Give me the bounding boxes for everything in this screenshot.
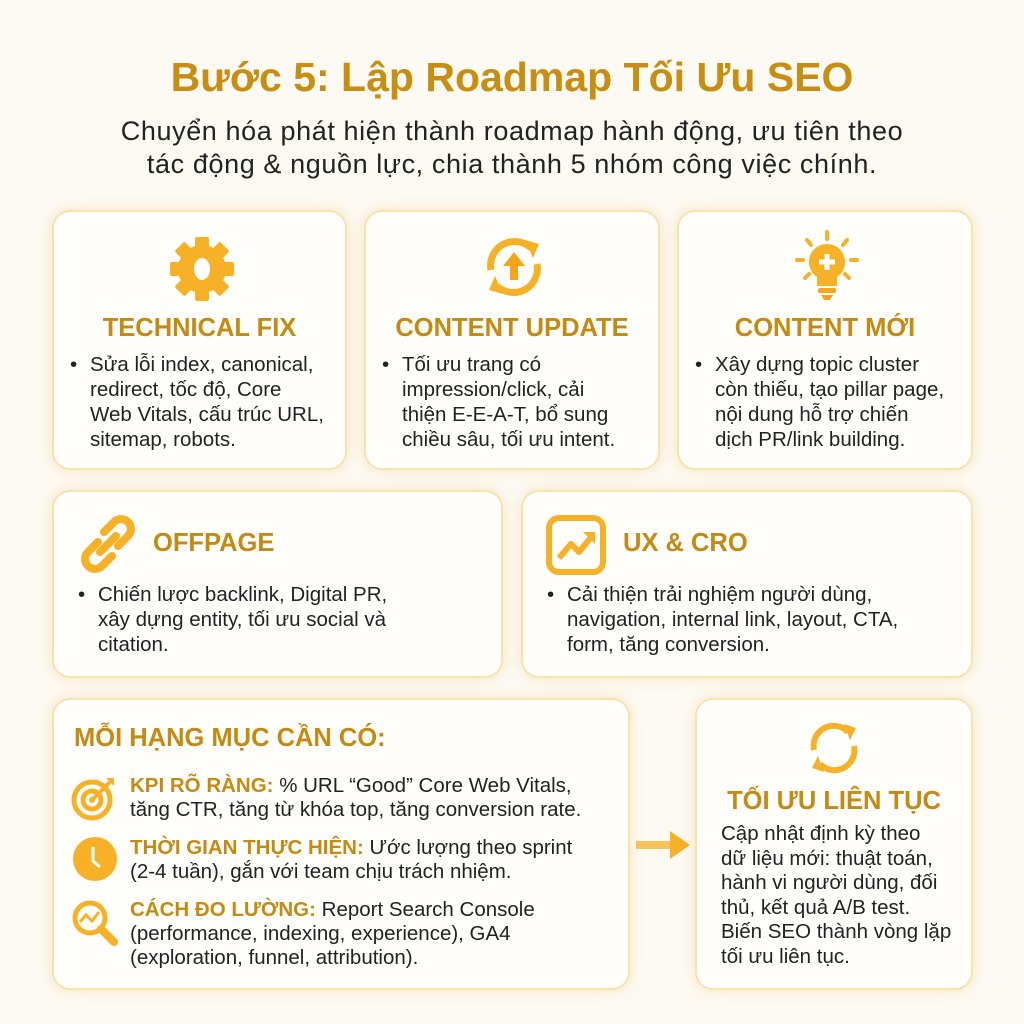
panel: moi hang muc can co — [52, 698, 630, 990]
item: cach do luong — [130, 898, 535, 969]
text: tối ưu liên tục. — [721, 945, 850, 968]
icon: refresh — [810, 722, 858, 774]
text: nội dung hỗ trợ chiến — [715, 403, 909, 426]
heading: MỖI HẠNG MỤC CẦN CÓ: — [74, 724, 386, 752]
heading: UX & CRO — [623, 529, 748, 557]
item: cach do luong: CÁCH ĐO LƯỜNG: Report Search Console — [130, 898, 535, 921]
item: thoi gian: THỜI GIAN THỰC HIỆN: Ước lượng theo sprint — [130, 836, 572, 859]
text: Sửa lỗi index, canonical, — [90, 353, 313, 376]
icon: chart — [546, 515, 606, 575]
heading: TECHNICAL FIX — [103, 314, 296, 342]
heading: CONTENT MỚI — [735, 314, 915, 342]
panel: toi uu lien tuc — [695, 698, 973, 990]
text: Chiến lược backlink, Digital PR, — [98, 583, 387, 606]
heading: CONTENT UPDATE — [395, 314, 629, 342]
icon: bulb — [795, 230, 859, 300]
item: KPI — [130, 774, 581, 821]
text: Xây dựng topic cluster — [715, 353, 919, 376]
title: Bước 5: Lập Roadmap Tối Ưu SEO — [171, 54, 853, 100]
text: Tối ưu trang có — [402, 353, 541, 376]
text: dịch PR/link building. — [715, 428, 905, 451]
icon: clock — [73, 837, 117, 881]
text: Cải thiện trải nghiệm người dùng, — [567, 583, 872, 606]
subtitle: Chuyển hóa phát hiện thành roadmap hành động, ưu tiên theo — [121, 116, 903, 146]
item: cach do luong: (exploration, funnel, attribution). — [130, 946, 418, 969]
subtitle: tác động & nguồn lực, chia thành 5 nhóm công việc chính. — [147, 149, 877, 179]
text — [382, 353, 615, 451]
panel: content moi — [677, 210, 973, 470]
panel: technical fix — [52, 210, 347, 470]
icon: target — [72, 778, 114, 820]
text: dữ liệu mới: thuật toán, — [721, 847, 933, 870]
text: redirect, tốc độ, Core — [90, 378, 281, 401]
text: hành vi người dùng, đối — [721, 871, 937, 894]
panel: offpage — [52, 490, 503, 678]
text: Cập nhật định kỳ theo — [721, 822, 920, 845]
text: chiều sâu, tối ưu intent. — [402, 428, 615, 451]
text: sitemap, robots. — [90, 428, 236, 451]
text: Biến SEO thành vòng lặp — [721, 920, 951, 943]
text: navigation, internal link, layout, CTA, — [567, 608, 898, 631]
heading: TỐI ƯU LIÊN TỤC — [727, 787, 941, 815]
text: thiện E-E-A-T, bổ sung — [402, 403, 608, 426]
heading: OFFPAGE — [153, 529, 274, 557]
text: impression/click, cải — [402, 378, 584, 401]
text: còn thiếu, tạo pillar page, — [715, 378, 944, 401]
panel: ux cro — [521, 490, 973, 678]
text: Web Vitals, cấu trúc URL, — [90, 403, 324, 426]
panel: content update — [364, 210, 660, 470]
item: KPI: KPI RÕ RÀNG: % URL “Good” Core Web Vitals, — [130, 774, 572, 797]
text — [696, 353, 944, 451]
text — [721, 822, 951, 968]
item: cach do luong: (performance, indexing, experience), GA4 — [130, 922, 511, 945]
item: thoi gian — [130, 836, 572, 883]
arrow — [636, 831, 690, 859]
text — [78, 583, 387, 656]
item: thoi gian: (2-4 tuần), gắn với team chịu trách nhiệm. — [130, 860, 511, 883]
icon: magnifier chart — [72, 900, 118, 946]
text — [70, 353, 324, 451]
text: form, tăng conversion. — [567, 633, 770, 656]
icon: gear — [170, 237, 234, 301]
text: xây dựng entity, tối ưu social và — [98, 608, 386, 631]
text — [548, 583, 898, 656]
text: thủ, kết quả A/B test. — [721, 896, 910, 919]
text: citation. — [98, 633, 169, 656]
item: KPI: tăng CTR, tăng từ khóa top, tăng conversion rate. — [130, 798, 581, 821]
icon: refresh up — [487, 238, 541, 296]
subtitle — [121, 116, 903, 179]
icon: link — [81, 515, 135, 573]
